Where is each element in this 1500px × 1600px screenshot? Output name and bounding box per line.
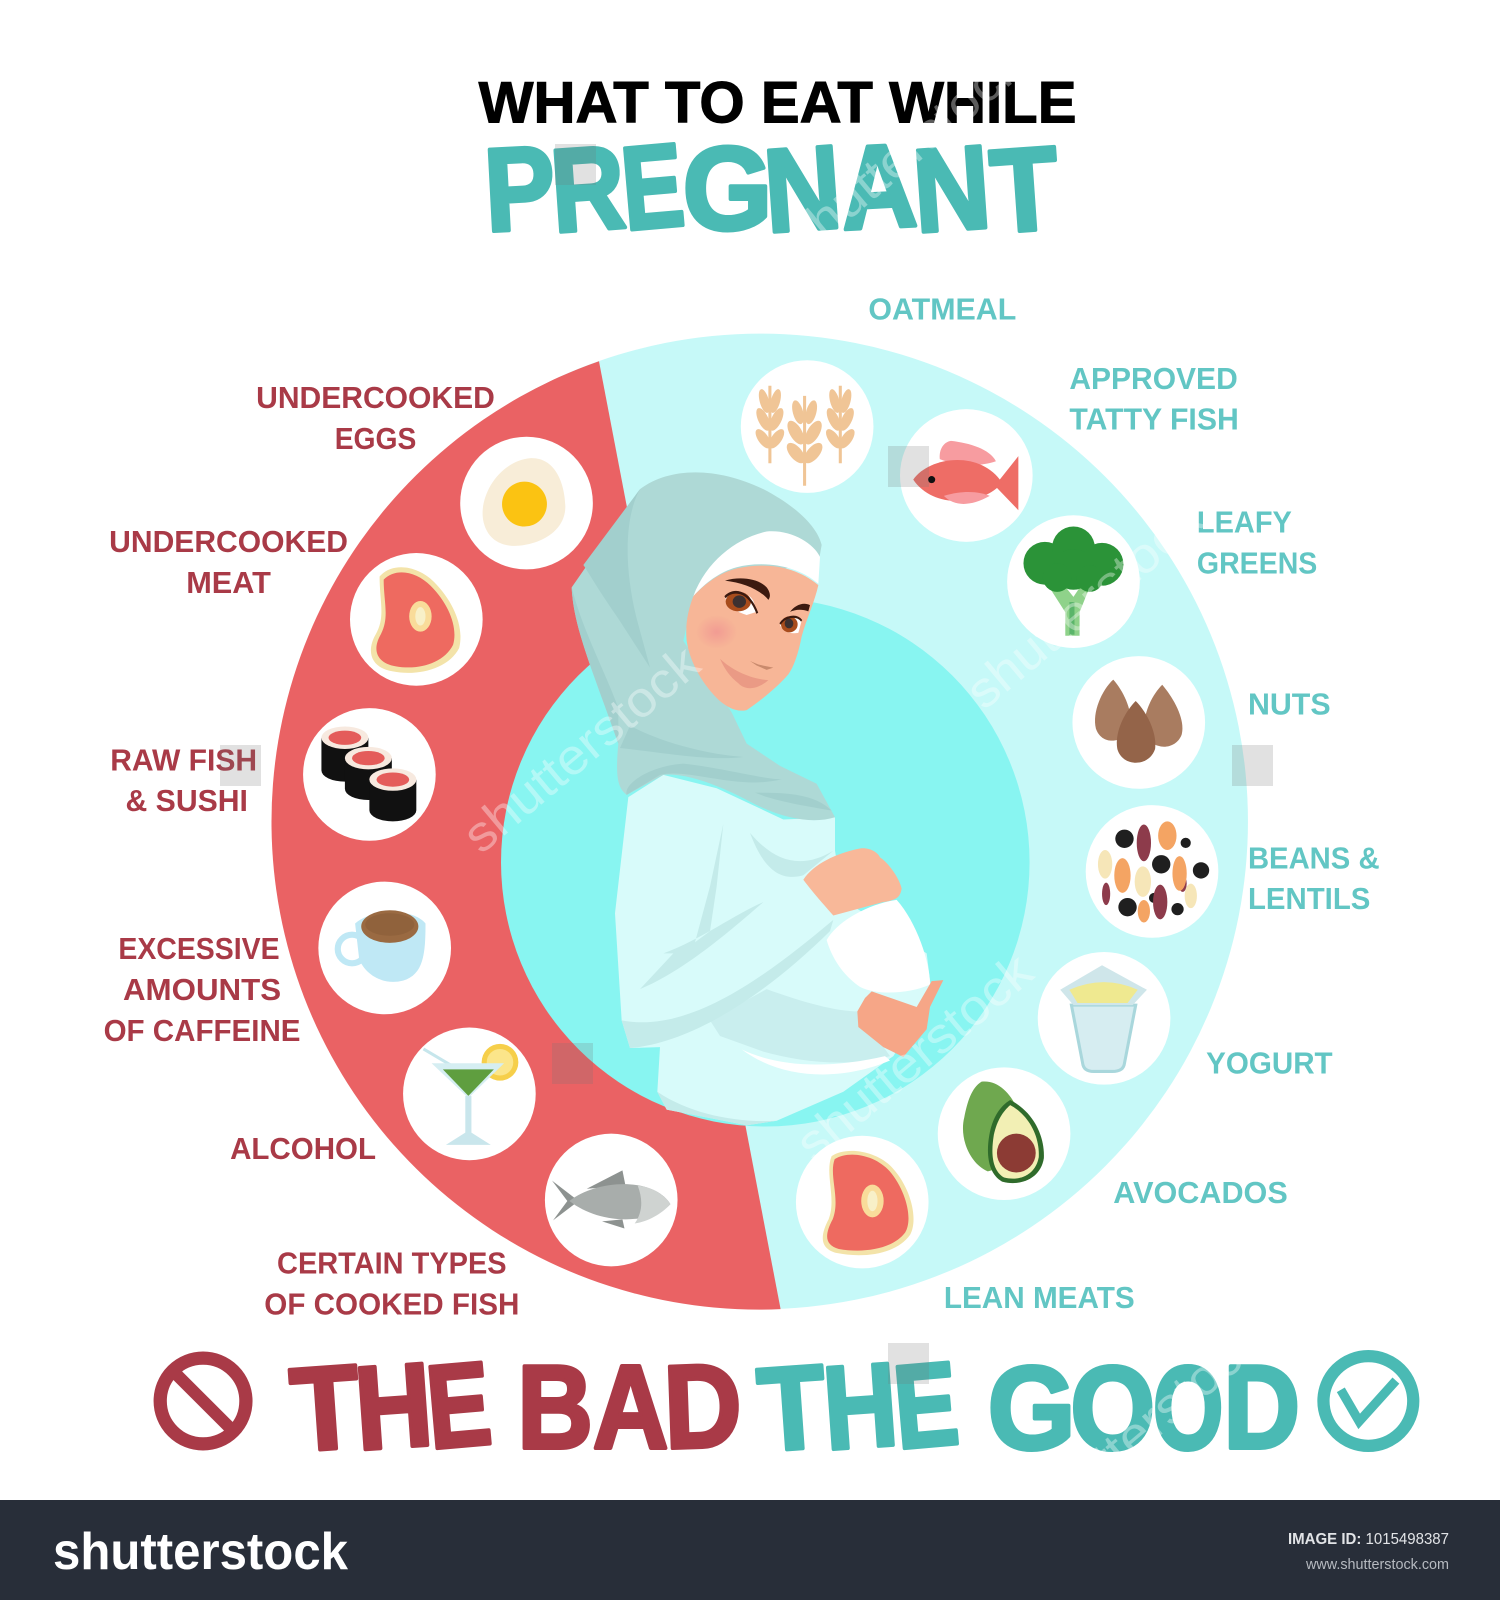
labels: the bad foods: RAW FISH bbox=[110, 743, 257, 777]
hijab fold shadows bbox=[572, 489, 832, 811]
heading: the bad: T bbox=[287, 1341, 364, 1477]
heading: the good: T bbox=[754, 1341, 830, 1477]
face bbox=[686, 566, 818, 711]
labels: the bad foods: ALCOHOL bbox=[230, 1132, 376, 1166]
labels: the good foods: TATTY FISH bbox=[1069, 403, 1239, 437]
watermark overlays: shutterstock bbox=[452, 634, 711, 864]
title word: pregnant bbox=[481, 119, 1063, 259]
heading: the good: G bbox=[988, 1343, 1076, 1475]
labels: the bad foods: EGGS bbox=[335, 422, 416, 456]
labels: the bad foods: EXCESSIVE bbox=[118, 932, 280, 966]
watermark overlays: shutterstock bbox=[775, 37, 1034, 267]
labels: the good foods: LEAN MEATS bbox=[944, 1281, 1135, 1315]
icon: sushi rolls bbox=[303, 708, 436, 841]
heading: the bad: A bbox=[593, 1342, 668, 1474]
heading: the good: D bbox=[1223, 1342, 1300, 1474]
labels: the bad foods: OF CAFFEINE bbox=[104, 1014, 301, 1048]
icon: beans and lentils bbox=[1086, 805, 1218, 938]
watermark overlays: shutterstock bbox=[785, 942, 1044, 1172]
panel: the bad crescent bbox=[271, 361, 781, 1310]
labels: the bad foods: AMOUNTS bbox=[123, 973, 281, 1007]
icon: broccoli bbox=[1007, 515, 1140, 648]
labels: the good foods: AVOCADOS bbox=[1113, 1176, 1288, 1210]
labels: the good foods: BEANS & bbox=[1248, 841, 1380, 875]
icon: oat stalks bbox=[741, 360, 873, 493]
hem highlight bbox=[742, 1049, 890, 1074]
labels: the good foods: OATMEAL bbox=[868, 292, 1016, 326]
labels: the good foods: NUTS bbox=[1248, 687, 1331, 721]
title word: pregnant: N bbox=[909, 121, 995, 258]
icon: grey fish bbox=[545, 1134, 678, 1266]
mouth bbox=[720, 659, 768, 688]
nose bbox=[750, 661, 773, 670]
icon: avocado bbox=[938, 1067, 1070, 1200]
title word: pregnant: P bbox=[481, 122, 558, 257]
sleeve folds bbox=[622, 824, 833, 1048]
heading: the good: E bbox=[889, 1337, 963, 1474]
lower hand bbox=[857, 980, 943, 1057]
lower belly shadow bbox=[710, 989, 890, 1063]
site url: www.shutterstock.com bbox=[1305, 1556, 1449, 1573]
labels: the bad foods: OF COOKED FISH bbox=[264, 1287, 519, 1321]
heading: the good: O bbox=[1070, 1343, 1155, 1475]
brows and eyes bbox=[725, 578, 810, 633]
heading: the good: O bbox=[1153, 1343, 1223, 1475]
blush bbox=[696, 615, 737, 649]
heading: the bad: E bbox=[421, 1337, 496, 1474]
icon: coffee cup bbox=[318, 882, 451, 1014]
title bbox=[479, 70, 1077, 259]
labels: the bad foods bbox=[104, 381, 519, 1321]
title word: pregnant: T bbox=[987, 122, 1063, 259]
belly highlight bbox=[827, 900, 930, 993]
heading: the bad: D bbox=[662, 1340, 744, 1474]
watermark overlays bbox=[452, 37, 1274, 1542]
title word: pregnant: N bbox=[760, 121, 846, 258]
title word: pregnant: A bbox=[837, 120, 920, 255]
footer banner bbox=[0, 1500, 1500, 1600]
heading: the bad bbox=[287, 1337, 744, 1477]
robe body bbox=[615, 775, 932, 1125]
icon: prohibition sign bbox=[160, 1358, 246, 1444]
brand wordmark: shutterstock bbox=[53, 1523, 348, 1581]
icon: check mark badge bbox=[1323, 1356, 1413, 1446]
watermark overlays: shutterstock bbox=[955, 490, 1214, 720]
illustration: pregnant woman in hijab bbox=[572, 472, 943, 1125]
labels: the bad foods: MEAT bbox=[186, 566, 271, 600]
white under-scarf bbox=[693, 531, 820, 596]
inner aqua circle bbox=[501, 598, 1030, 1127]
watermark squares bbox=[220, 144, 1273, 1384]
lower hem fold bbox=[657, 1092, 777, 1125]
upper hand bbox=[803, 848, 902, 915]
icon: fried egg bbox=[460, 437, 593, 569]
heading: the bad: H bbox=[351, 1339, 436, 1476]
icon: nuts bbox=[1072, 656, 1205, 789]
title word: pregnant: R bbox=[547, 121, 629, 258]
circle: the good background bbox=[272, 334, 1248, 1309]
icon: lean meat bbox=[796, 1136, 929, 1268]
icon: yogurt bbox=[1038, 952, 1170, 1085]
labels: the good foods: LEAFY bbox=[1197, 506, 1292, 540]
title word: pregnant: E bbox=[616, 119, 689, 256]
labels: the bad foods: UNDERCOOKED bbox=[109, 525, 348, 559]
labels: the bad foods: CERTAIN TYPES bbox=[277, 1246, 507, 1280]
icon: cocktail bbox=[403, 1028, 536, 1160]
labels: the good foods: APPROVED bbox=[1069, 362, 1238, 396]
labels: the good foods bbox=[868, 292, 1380, 1315]
icon: pink fish bbox=[900, 409, 1033, 542]
labels: the good foods: YOGURT bbox=[1206, 1046, 1333, 1080]
hijab bbox=[572, 472, 835, 820]
image id: IMAGE ID: 1015498387 bbox=[1288, 1531, 1449, 1548]
labels: the bad foods: & SUSHI bbox=[126, 784, 248, 818]
heading: the good bbox=[754, 1337, 1300, 1477]
title word: pregnant: G bbox=[683, 124, 772, 256]
labels: the good foods: LENTILS bbox=[1248, 882, 1370, 916]
icon: undercooked meat bbox=[350, 553, 483, 686]
heading: the good: H bbox=[819, 1339, 902, 1475]
labels: the bad foods: UNDERCOOKED bbox=[256, 381, 495, 415]
heading: the bad: B bbox=[517, 1342, 593, 1474]
labels: the good foods: GREENS bbox=[1197, 546, 1317, 580]
title line: what to eat while: WHAT TO EAT WHILE bbox=[479, 70, 1077, 135]
watermark overlays: shutterstock bbox=[1015, 1312, 1274, 1542]
